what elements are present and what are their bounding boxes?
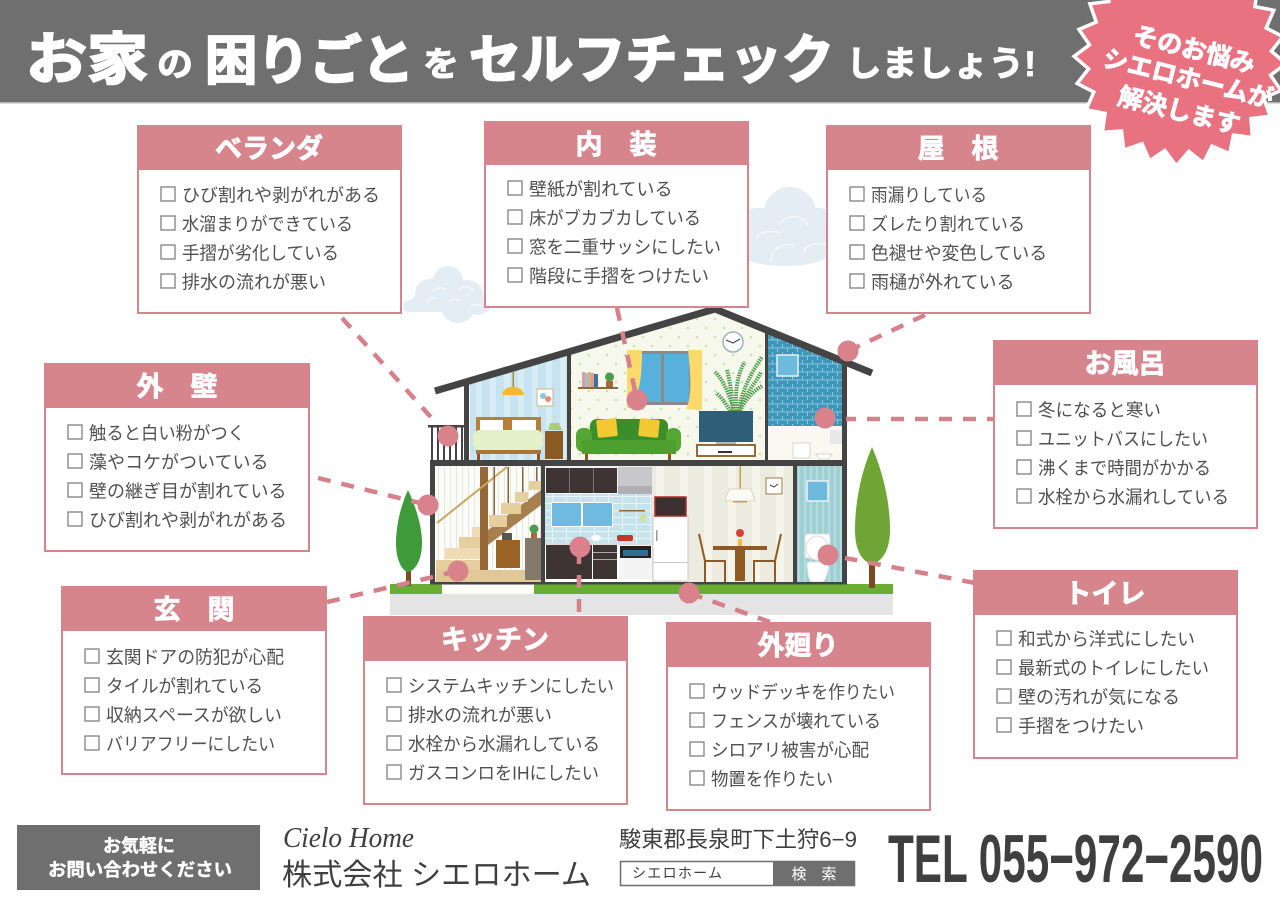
title banner — [0, 0, 1280, 104]
panel: ベランダ: 水溜まりができている — [182, 214, 353, 234]
contact callout: お問い合わせください — [48, 860, 232, 880]
panel: 外廻り: フェンスが壊れている — [711, 712, 881, 732]
house illustration — [428, 309, 872, 584]
contact callout — [17, 825, 260, 890]
dining — [699, 466, 782, 582]
panel: 外壁: 外 壁 — [136, 372, 218, 402]
panel: 内装: 窓を二重サッシにしたい — [529, 238, 721, 258]
panel: ベランダ: ひび割れや剥がれがある — [182, 186, 380, 206]
title banner: お家 — [26, 28, 148, 91]
title banner: しましょう! — [846, 45, 1036, 84]
bedroom — [473, 372, 563, 460]
panel: 内装: 内 装 — [576, 130, 656, 160]
panel: トイレ: 壁の汚れが気になる — [1018, 688, 1180, 708]
dashed leader lines — [318, 308, 1000, 622]
panel: 外廻り: ウッドデッキを作りたい — [711, 682, 895, 702]
panel: 屋根: 雨樋が外れている — [871, 272, 1014, 292]
starburst badge: シエロホームが — [1100, 44, 1276, 114]
panel: 玄関: バリアフリーにしたい — [106, 734, 275, 754]
title banner: の — [157, 46, 193, 84]
panel: お風呂: 沸くまで時間がかかる — [1038, 458, 1211, 478]
panel: トイレ — [973, 570, 1238, 758]
company name — [282, 823, 591, 892]
panel: トイレ: トイレ — [1064, 579, 1146, 609]
panel: 玄関: タイルが割れている — [106, 676, 263, 696]
panel: 内装: 壁紙が割れている — [529, 180, 672, 200]
panel: 屋根: 雨漏りしている — [871, 186, 987, 206]
address and search box: 検 索 — [791, 866, 837, 883]
panel: 外廻り — [666, 622, 931, 810]
panel: キッチン: ガスコンロをIHにしたい — [408, 764, 599, 784]
panel: ベランダ: 排水の流れが悪い — [182, 272, 326, 292]
panel: ベランダ: 手摺が劣化している — [182, 244, 339, 264]
panel: お風呂: 冬になると寒い — [1038, 400, 1161, 420]
panel: トイレ: 最新式のトイレにしたい — [1018, 658, 1209, 678]
clouds — [403, 187, 831, 323]
panel: 屋根 — [826, 125, 1091, 313]
panel: 外壁: 壁の継ぎ目が割れている — [89, 482, 286, 502]
panel: 玄関: 収納スペースが欲しい — [106, 706, 282, 726]
panel: お風呂 — [993, 340, 1258, 528]
bathroom — [777, 355, 842, 459]
panel: 内装 — [484, 121, 749, 307]
panel: キッチン: システムキッチンにしたい — [408, 676, 614, 696]
ground — [390, 584, 893, 615]
panel: 外壁: 藻やコケがついている — [89, 452, 268, 472]
panel: 外廻り: 物置を作りたい — [711, 770, 833, 790]
panel: 外壁: 触ると白い粉がつく — [89, 424, 245, 444]
title banner: を — [423, 46, 459, 84]
panel: 屋根: 色褪せや変色している — [871, 244, 1047, 264]
company name: Cielo Home — [283, 823, 414, 854]
panel: 内装: 階段に手摺をつけたい — [529, 266, 709, 286]
panel: 玄関: 玄関ドアの防犯が心配 — [106, 648, 284, 668]
title banner: 困りごと — [205, 32, 414, 91]
panel: キッチン — [363, 616, 628, 804]
panel: ベランダ — [137, 125, 402, 313]
panel: 玄関 — [61, 586, 327, 774]
panel: 屋根: 屋 根 — [918, 134, 998, 164]
walls and roof — [430, 309, 872, 584]
address and search box: シエロホーム — [632, 865, 722, 881]
panel: お風呂: お風呂 — [1084, 349, 1166, 379]
starburst badge — [1070, 0, 1280, 170]
panel: お風呂: ユニットバスにしたい — [1038, 430, 1208, 450]
panel: 外壁: ひび割れや剥がれがある — [89, 510, 287, 530]
starburst badge: 解決します — [1115, 83, 1243, 140]
contact callout: お気軽に — [103, 835, 175, 856]
address and search box — [619, 827, 857, 886]
panel: キッチン: 排水の流れが悪い — [408, 706, 552, 726]
title banner: セルフチェック — [469, 31, 834, 90]
panel: 屋根: ズレたり割れている — [871, 214, 1025, 234]
toilet — [805, 481, 830, 582]
panel: 外廻り: 外廻り — [758, 631, 838, 661]
panel: 外廻り: シロアリ被害が心配 — [711, 740, 869, 760]
trees — [396, 447, 890, 588]
panel: 内装: 床がブカブカしている — [529, 208, 701, 228]
panel: トイレ: 和式から洋式にしたい — [1018, 630, 1195, 650]
company name: 株式会社 シエロホーム — [282, 859, 591, 892]
panel: トイレ: 手摺をつけたい — [1018, 716, 1144, 736]
balcony railing — [428, 425, 464, 460]
room backgrounds — [435, 311, 843, 583]
address and search box: 駿東郡長泉町下土狩6−9 — [619, 827, 857, 852]
staircase — [436, 467, 541, 582]
location pins — [418, 340, 858, 604]
panel: キッチン: キッチン — [441, 625, 549, 655]
panel: キッチン: 水栓から水漏れしている — [408, 734, 600, 754]
living room — [576, 332, 762, 460]
panel: 玄関: 玄 関 — [154, 595, 234, 625]
panel: 外壁 — [44, 363, 310, 551]
panel: お風呂: 水栓から水漏れしている — [1038, 488, 1229, 508]
kitchen — [546, 467, 688, 581]
panel: ベランダ: ベランダ — [215, 133, 323, 164]
starburst badge: そのお悩み — [1130, 22, 1258, 79]
